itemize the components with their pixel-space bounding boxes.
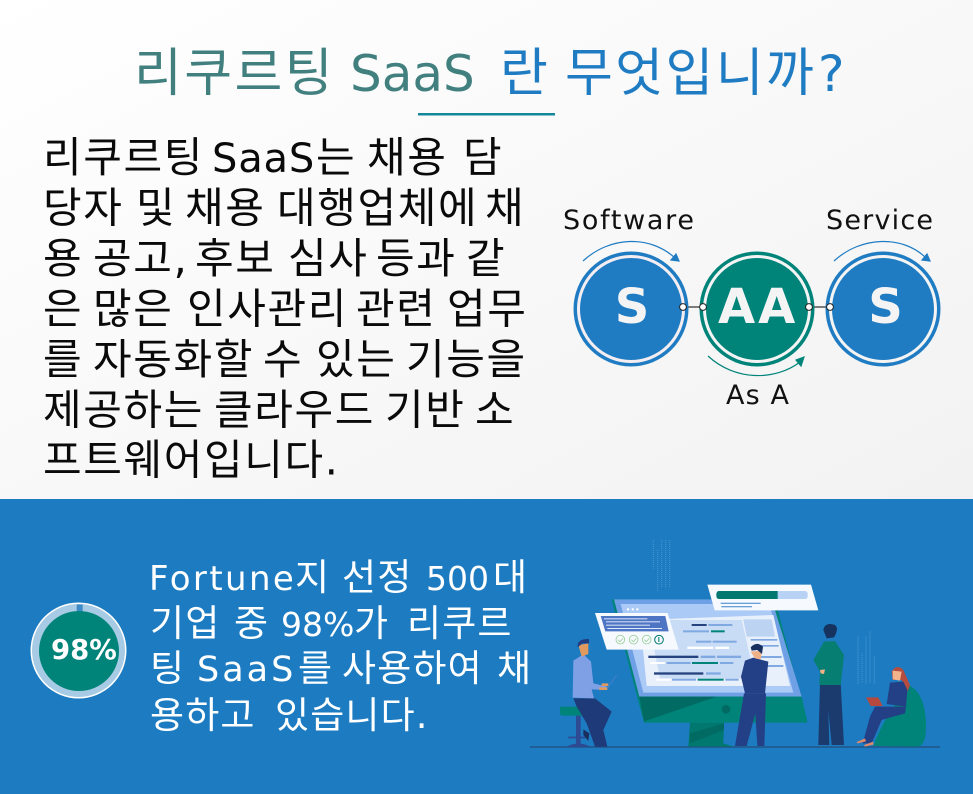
body paragraph: SaaS (212, 136, 315, 182)
screen (621, 604, 793, 693)
stat text: 500 (426, 559, 489, 598)
body paragraph: 있는 (316, 335, 396, 384)
person: standing man in green (813, 624, 844, 745)
label: Software: Software (563, 205, 694, 236)
label: Service: Service (826, 205, 933, 236)
stat text: 리쿠르 (407, 602, 513, 645)
connector lines (683, 306, 830, 308)
title: SaaS (350, 45, 475, 103)
body paragraph: 제공하는 (43, 386, 204, 434)
body paragraph: 리쿠르팅 (43, 133, 204, 182)
stat text (149, 556, 532, 737)
body paragraph: 많은 (93, 284, 173, 334)
person: woman on beanbag with laptop (857, 667, 926, 747)
stat text: 선정 (342, 556, 412, 599)
stat text: 사용하여 (342, 647, 483, 690)
body paragraph (43, 133, 527, 484)
title: 란 (500, 44, 550, 104)
circle: S: S (868, 279, 903, 335)
illustration: recruiting team around monitor (530, 540, 940, 748)
body paragraph: 당자 (43, 184, 123, 232)
donut 98%: 98% (51, 634, 117, 666)
stat text: 채 (497, 647, 532, 690)
bottom panel background (0, 499, 973, 794)
body paragraph: 용 (43, 234, 83, 283)
stat text: 대 (493, 556, 528, 599)
stat text: 98% (281, 605, 354, 644)
data dots (653, 540, 874, 683)
stat text: 기업 (150, 602, 220, 645)
donut 98% (30, 602, 126, 698)
circle: S: S (615, 279, 649, 335)
body paragraph: 자동화할 (93, 335, 254, 384)
person: seated man with laptop (560, 639, 617, 747)
body paragraph: 같 (466, 234, 506, 283)
stat text: 팅 (150, 647, 185, 690)
body paragraph: 업무 (447, 284, 527, 334)
body paragraph: 심사 (288, 234, 368, 283)
body paragraph: 등과 (376, 234, 456, 283)
arrow: Software (583, 241, 679, 261)
body paragraph: 기능을 (406, 335, 527, 384)
body paragraph: 담 (463, 133, 503, 182)
checklist card (595, 613, 679, 650)
body paragraph: 채 (485, 184, 525, 232)
body paragraph: 채용 (367, 133, 447, 182)
body paragraph: 공고, (93, 234, 188, 283)
stat text: 지 (295, 556, 330, 599)
body paragraph: 채용 (185, 184, 265, 232)
monitor stand (688, 723, 733, 747)
body paragraph: 수 (263, 335, 303, 384)
SaaS diagram (563, 205, 940, 411)
stat text: 를 (298, 647, 333, 690)
body paragraph: 및 (136, 184, 176, 232)
progress card (707, 585, 818, 610)
arrow: Service (834, 241, 930, 261)
body paragraph: 대행업체에 (277, 184, 478, 232)
circle: S (826, 252, 940, 366)
stat text: SaaS (197, 650, 296, 690)
stat text: 있습니다. (275, 694, 429, 737)
circle: AA (700, 252, 814, 366)
body paragraph: 은 (43, 284, 83, 334)
title: 무엇입니까 (565, 44, 816, 104)
stat text: 가 (354, 602, 389, 645)
stat text: 중 (234, 602, 269, 645)
floor line (530, 746, 940, 748)
monitor frame (612, 599, 807, 723)
body paragraph: 후보 (195, 234, 275, 283)
circle: S (574, 252, 688, 366)
body paragraph: 관련 (356, 284, 436, 334)
connector nodes (680, 304, 833, 310)
body paragraph: 인사관리 (187, 284, 348, 334)
stat text: Fortune (149, 559, 295, 599)
label: As A: As A (726, 380, 790, 411)
body paragraph: 소 (475, 386, 515, 434)
body paragraph: 를 (43, 335, 83, 384)
arrow: As A (708, 356, 804, 376)
stat text: 용하고 (150, 694, 256, 737)
title underline (418, 113, 555, 116)
title: ? (818, 45, 847, 103)
body paragraph: 프트웨어입니다. (43, 436, 340, 484)
circle: AA: AA (718, 279, 798, 335)
body paragraph: 는 (316, 133, 356, 182)
top panel background (0, 0, 973, 499)
body paragraph: 기반 (385, 386, 465, 434)
title: 리쿠르팅 (134, 44, 335, 104)
body paragraph: 클라우드 (214, 386, 375, 434)
person: thinking man (735, 644, 768, 746)
